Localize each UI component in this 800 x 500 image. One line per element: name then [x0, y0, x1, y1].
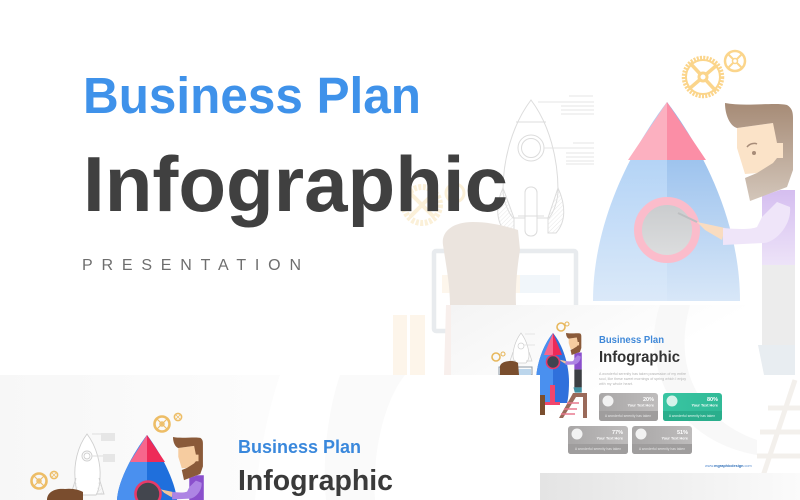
small ladder	[559, 393, 587, 418]
title: Infographic: Infographic	[83, 140, 508, 228]
background small gears faint	[404, 184, 464, 223]
slide body text: soul, like these sweet mornings of spring which I enjoy	[599, 377, 686, 381]
background desk person, monitor and books	[393, 222, 576, 375]
slide heading: Business Plan	[599, 335, 664, 346]
front slide desk person hair	[47, 489, 83, 500]
website link: www.mgraphicdesign.com	[705, 464, 752, 468]
card: 20%: Your Text Here	[628, 404, 654, 408]
front slide man	[161, 437, 204, 500]
card: 20%	[599, 393, 658, 421]
small desk person and monitor	[499, 361, 532, 375]
subtitle: PRESENTATION: PRESENTATION	[82, 257, 301, 274]
card: 77%: A wonderful serenity has taken	[575, 447, 621, 451]
card: 80%: A wonderful serenity has taken	[669, 414, 715, 418]
card: 80%: Your Text Here	[692, 404, 718, 408]
small sketch rocket	[510, 333, 535, 363]
large rocket	[593, 102, 740, 301]
card: 20%: A wonderful serenity has taken	[605, 414, 651, 418]
card: 51%	[632, 426, 692, 454]
middle slide preview: Infographic	[599, 349, 680, 366]
middle slide preview	[451, 305, 757, 473]
large man figure	[678, 103, 795, 375]
card: 80%: 80%	[707, 397, 718, 403]
card: 77%	[568, 426, 628, 454]
card: 51%: A wonderful serenity has taken	[639, 447, 685, 451]
card: 51%: 51%	[677, 430, 688, 436]
slide body text: A wonderful serenity has taken possession of my entire	[599, 372, 686, 376]
large gears	[684, 51, 745, 96]
small gears	[492, 322, 569, 361]
strip under middle slide	[451, 473, 800, 500]
slide body text: with my whole heart.	[599, 382, 633, 386]
faint ladder at right	[752, 380, 800, 500]
front slide preview: Infographic	[238, 465, 393, 497]
small man	[560, 333, 582, 393]
front slide preview	[0, 375, 540, 500]
front slide sketch rocket	[71, 433, 115, 495]
card: 80%	[663, 393, 722, 421]
small rocket	[536, 333, 569, 415]
card: 77%: Your Text Here	[597, 436, 623, 440]
front slide rocket	[117, 435, 177, 500]
card: 20%: 20%	[643, 397, 654, 403]
background rocket sketch	[498, 96, 594, 236]
card: 77%: 77%	[612, 430, 623, 436]
front slide heading: Business Plan	[238, 437, 361, 457]
slide body text	[599, 372, 686, 386]
front slide gears	[32, 413, 182, 488]
title: Business Plan: Business Plan	[83, 67, 421, 124]
card: 51%: Your Text Here	[662, 436, 688, 440]
